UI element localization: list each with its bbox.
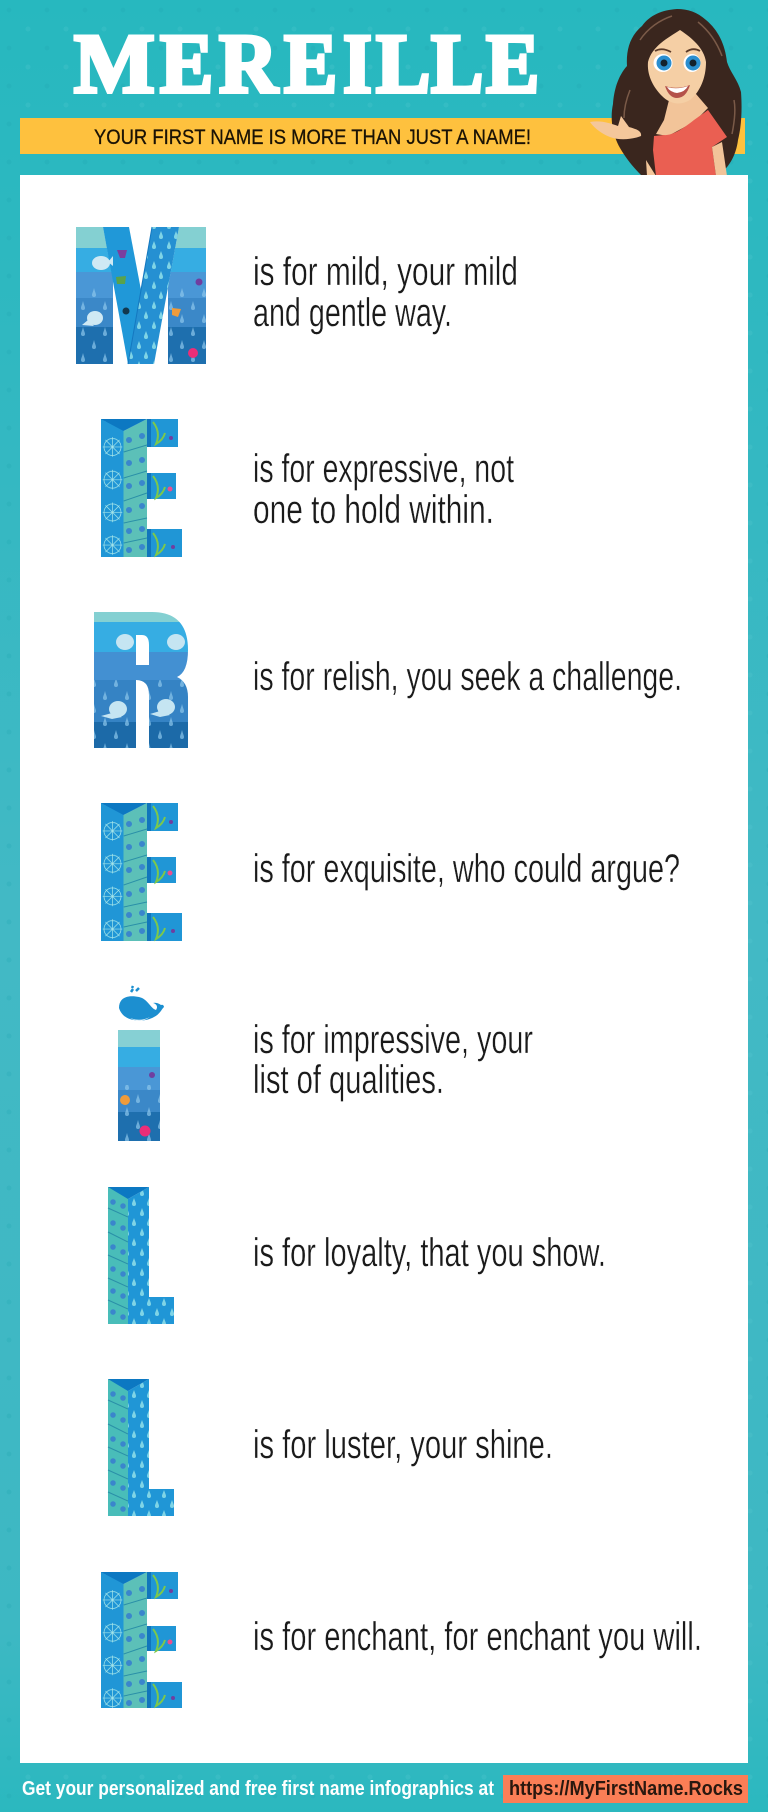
badge: website URL: https://MyFirstName.Rocks: [509, 1778, 743, 1800]
letter L row 2: [108, 1379, 553, 1516]
icon: letter L: [108, 1379, 174, 1516]
title: I: [343, 17, 372, 111]
arm and hand: [590, 116, 656, 176]
icon: letter E: [101, 419, 182, 557]
icon: whales: [82, 256, 113, 326]
text: I line 2: list of qualities.: [253, 1058, 444, 1102]
icon: letter E: [101, 1572, 182, 1708]
text: M line 1: is for mild, your mild: [253, 250, 518, 294]
title: M: [74, 17, 154, 111]
icon: letter M: [76, 227, 206, 364]
skin: neck and chest: [656, 94, 708, 136]
text: L: is for loyalty, that you show.: [253, 1231, 606, 1275]
letter L row 1: [108, 1187, 606, 1324]
footer: [22, 1775, 748, 1803]
eyes: [654, 49, 700, 72]
letter R row: [94, 612, 682, 748]
title: L: [431, 17, 483, 111]
shirt: [653, 110, 727, 176]
icon: letter I: [118, 1030, 160, 1141]
banner: tagline: [20, 118, 745, 154]
letter I row: [118, 986, 533, 1141]
title: R: [219, 17, 277, 111]
letter E row 2: [101, 803, 680, 941]
text: L: is for luster, your shine.: [253, 1423, 553, 1467]
title: E: [284, 17, 338, 111]
banner: tagline: YOUR FIRST NAME IS MORE THAN JUST A NAME!: [94, 126, 531, 149]
text: M line 2: and gentle way.: [253, 291, 452, 335]
text: E line 2: one to hold within.: [253, 488, 494, 532]
mouth: [665, 85, 690, 98]
illustration: cartoon woman: [590, 9, 742, 176]
letter E row 3: [101, 1572, 702, 1708]
icon: letter L: [108, 1187, 174, 1324]
text: E line 1: is for expressive, not: [253, 447, 514, 491]
icon: letter R: [94, 612, 188, 748]
text: footer call to action: Get your personalized and free first name infographics at: [22, 1778, 494, 1800]
text: I line 1: is for impressive, your: [253, 1018, 533, 1062]
icon: whales: [101, 634, 185, 719]
letter E row 1: [101, 419, 514, 557]
face: [648, 30, 706, 103]
letter M row: [76, 227, 518, 364]
title: E: [486, 17, 540, 111]
icon: whale: [119, 986, 164, 1021]
icon: letter E: [101, 803, 182, 941]
title: [73, 17, 540, 111]
title: E: [160, 17, 214, 111]
title: L: [376, 17, 430, 111]
